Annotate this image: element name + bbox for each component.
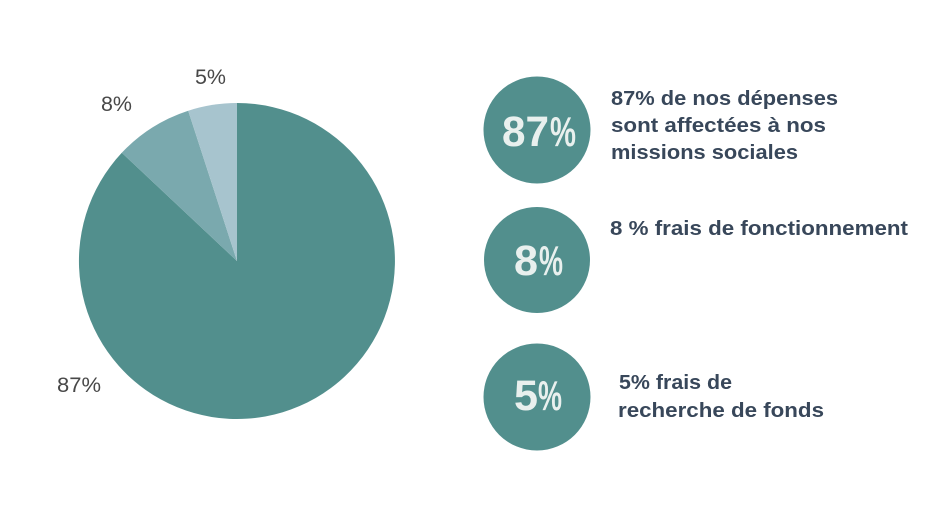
badge value: 8%: %: [539, 237, 563, 284]
badge: 5%: [484, 344, 590, 450]
description: 5%: 5% frais de: [619, 371, 732, 394]
description: 87%: [611, 87, 838, 164]
badge value: 87%: 87: [502, 108, 549, 156]
description: 5%: recherche de fonds: [618, 399, 824, 422]
pie label: 8%: 8%: [101, 93, 132, 116]
slice: 87%: [79, 103, 395, 419]
slice: 8%: [122, 111, 237, 261]
description: 5%: [618, 371, 824, 422]
badge value: 8%: 8: [514, 237, 538, 285]
legend item: 8%: [484, 207, 908, 313]
badge: 87%: [484, 76, 590, 184]
description: 87%: 87% de nos dépenses: [611, 87, 838, 110]
pie chart: [57, 66, 395, 419]
legend item: 5%: [484, 344, 824, 450]
badge value: 5%: %: [538, 372, 562, 419]
badge value: 5%: [514, 372, 562, 420]
badge value: 87%: %: [550, 108, 576, 155]
description: 87%: sont affectées à nos: [611, 114, 826, 137]
legend item: 87%: [484, 76, 838, 184]
slice: 5%: [188, 103, 237, 261]
badge value: 8%: [514, 237, 563, 285]
badge value: 87%: [502, 108, 576, 156]
description: 87%: missions sociales: [611, 141, 798, 164]
pie label: 5%: 5%: [195, 66, 226, 89]
badge: 8%: [484, 207, 590, 313]
description: 8%: 8 % frais de fonctionnement: [610, 217, 908, 240]
pie label: 87%: 87%: [57, 374, 101, 397]
badge value: 5%: 5: [514, 372, 538, 420]
